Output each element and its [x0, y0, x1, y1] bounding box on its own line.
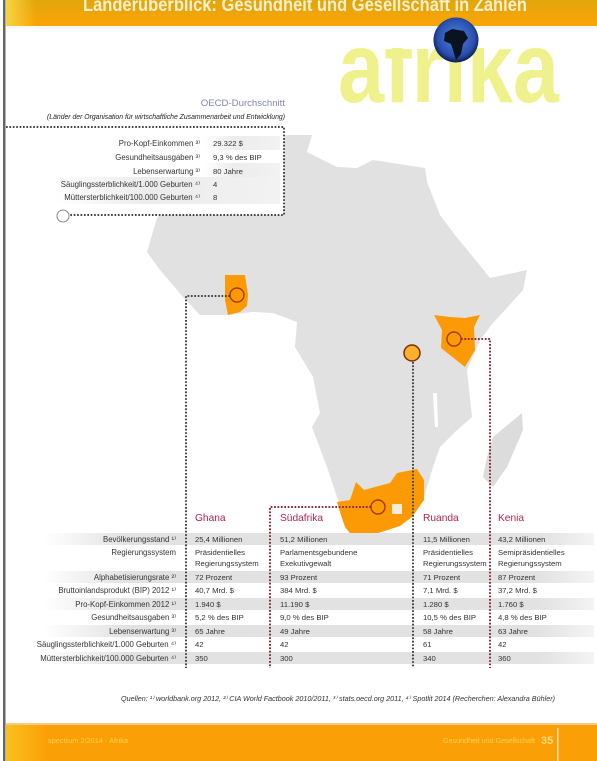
table row labels: Bruttoinlandsprodukt (BIP) 2012 ¹⁾ [58, 586, 176, 595]
column: Ghana: Regierungssystem [195, 559, 259, 568]
column: Südafrika: 42 [280, 640, 289, 649]
OECD rows: 9,3 % des BIP [213, 153, 262, 162]
column: Kenia: Regierungssystem [498, 559, 562, 568]
column: Ruanda: 11,5 Millionen [423, 535, 470, 544]
column: Ghana: 72 Prozent [195, 573, 233, 582]
map of Africa [147, 135, 527, 520]
column: Ghana: 25,4 Millionen [195, 535, 242, 544]
column: Südafrika: Parlamentsgebundene [280, 548, 357, 557]
OECD panel [6, 98, 285, 222]
column: Ghana: 40,7 Mrd. $ [195, 586, 235, 595]
footer right text: Gesundheit und Gesellschaft [443, 736, 535, 745]
column: Ruanda: 71 Prozent [423, 573, 461, 582]
column: Ruanda: Präsidentielles [423, 548, 473, 557]
column: Kenia: 1.760 $ [498, 600, 524, 609]
column: Ruanda: 340 [423, 654, 436, 663]
lake [433, 393, 438, 427]
page number: 35 [541, 735, 553, 747]
column: Ghana: 5,2 % des BIP [195, 613, 244, 622]
column: Kenia: Kenia [498, 513, 524, 524]
OECD rows: Pro-Kopf-Einkommen ³⁾ [119, 139, 200, 148]
column: Ghana: 350 [195, 654, 208, 663]
table row labels [37, 535, 176, 663]
OECD rows: Lebenserwartung ³⁾ [133, 167, 200, 176]
table row labels: Regierungssystem [111, 548, 176, 557]
table row labels: Müttersterblichkeit/100.000 Geburten ⁴⁾ [40, 654, 176, 663]
column: Südafrika: 51,2 Millionen [280, 535, 327, 544]
connector: Ruanda [412, 362, 414, 668]
column: Ruanda [423, 513, 487, 663]
left page edge [3, 0, 6, 761]
column: Südafrika [280, 513, 357, 663]
OECD subheading: (Länder der Organisation für wirtschaftliche Zusammenarbeit und Entwicklung) [47, 112, 285, 121]
column: Kenia: Semipräsidentielles [498, 548, 565, 557]
column: Ghana: 1.940 $ [195, 600, 221, 609]
icon: globe [434, 18, 478, 62]
column: Kenia: 63 Jahre [498, 627, 528, 636]
column: Ghana: 65 Jahre [195, 627, 225, 636]
column: Südafrika: 93 Prozent [280, 573, 318, 582]
column: Kenia: 37,2 Mrd. $ [498, 586, 538, 595]
column: Ghana: 42 [195, 640, 204, 649]
table row labels: Alphabetisierungsrate ²⁾ [94, 573, 176, 582]
column: Kenia: 360 [498, 654, 511, 663]
footer band [6, 723, 597, 761]
OECD rows [61, 139, 262, 202]
column: Ruanda: 7,1 Mrd. $ [423, 586, 458, 595]
column: Ghana: Ghana [195, 513, 226, 524]
OECD rows: 8 [213, 193, 217, 202]
column: Südafrika: 384 Mrd. $ [280, 586, 317, 595]
OECD rows: Müttersterblichkeit/100.000 Geburten ⁴⁾ [64, 193, 200, 202]
column: Südafrika: 300 [280, 654, 293, 663]
column: Ghana: Präsidentielles [195, 548, 245, 557]
table row labels: Lebenserwartung ³⁾ [109, 627, 176, 636]
highlighted country: South Africa [337, 469, 424, 537]
sources: Quellen: ¹⁾ worldbank.org 2012, ²⁾ CIA World Factbook 2010/2011, ³⁾ stats.oecd.org 2011, ⁴⁾ Spotlit 2014 (Recherchen: Alexandra Bühler) [121, 694, 556, 703]
word mark: afrika: afrika [338, 12, 560, 124]
table row labels: Gesundheitsausgaben ³⁾ [91, 613, 176, 622]
connector: Kenia [461, 339, 490, 668]
column: Südafrika: Südafrika [280, 513, 323, 524]
highlighted country: Rwanda [404, 345, 420, 361]
table row labels: Pro-Kopf-Einkommen 2012 ¹⁾ [75, 600, 176, 609]
column: Südafrika: Exekutivgewalt [280, 559, 332, 568]
column: Ruanda: 58 Jahre [423, 627, 453, 636]
Madagascar [483, 413, 523, 487]
OECD rows: 4 [213, 180, 218, 189]
OECD rows: Gesundheitsausgaben ³⁾ [115, 153, 200, 162]
highlighted country: Ghana [225, 275, 248, 315]
column: Ruanda: Regierungssystem [423, 559, 487, 568]
column: Kenia: 42 [498, 640, 507, 649]
header band [6, 0, 597, 29]
column: Südafrika: 49 Jahre [280, 627, 310, 636]
table [37, 513, 594, 664]
column: Ruanda: 10,5 % des BIP [423, 613, 476, 622]
column: Kenia: 43,2 Millionen [498, 535, 545, 544]
column: Kenia [498, 513, 565, 663]
table row labels: Säuglingssterblichkeit/1.000 Geburten ⁴⁾ [37, 640, 176, 649]
column: Ruanda: 1.280 $ [423, 600, 449, 609]
OECD rows: 29.322 $ [213, 139, 244, 148]
column: Ghana [195, 513, 259, 663]
OECD rows: 80 Jahre [213, 167, 243, 176]
footer left text: spectrum 2/2014 · Afrika [48, 736, 128, 745]
column: Kenia: 87 Prozent [498, 573, 536, 582]
connector: Südafrika [270, 507, 371, 668]
column: Südafrika: 11.190 $ [280, 600, 310, 609]
column: Ruanda: Ruanda [423, 513, 459, 524]
column: Südafrika: 9,0 % des BIP [280, 613, 329, 622]
highlighted country: Kenya [434, 315, 480, 367]
column: Ruanda: 61 [423, 640, 432, 649]
table row labels: Bevölkerungsstand ¹⁾ [103, 535, 176, 544]
OECD rows: Säuglingssterblichkeit/1.000 Geburten ⁴⁾ [61, 180, 200, 189]
column: Kenia: 4,8 % des BIP [498, 613, 547, 622]
connector: Ghana [186, 296, 230, 668]
OECD heading: OECD-Durchschnitt [201, 98, 285, 109]
